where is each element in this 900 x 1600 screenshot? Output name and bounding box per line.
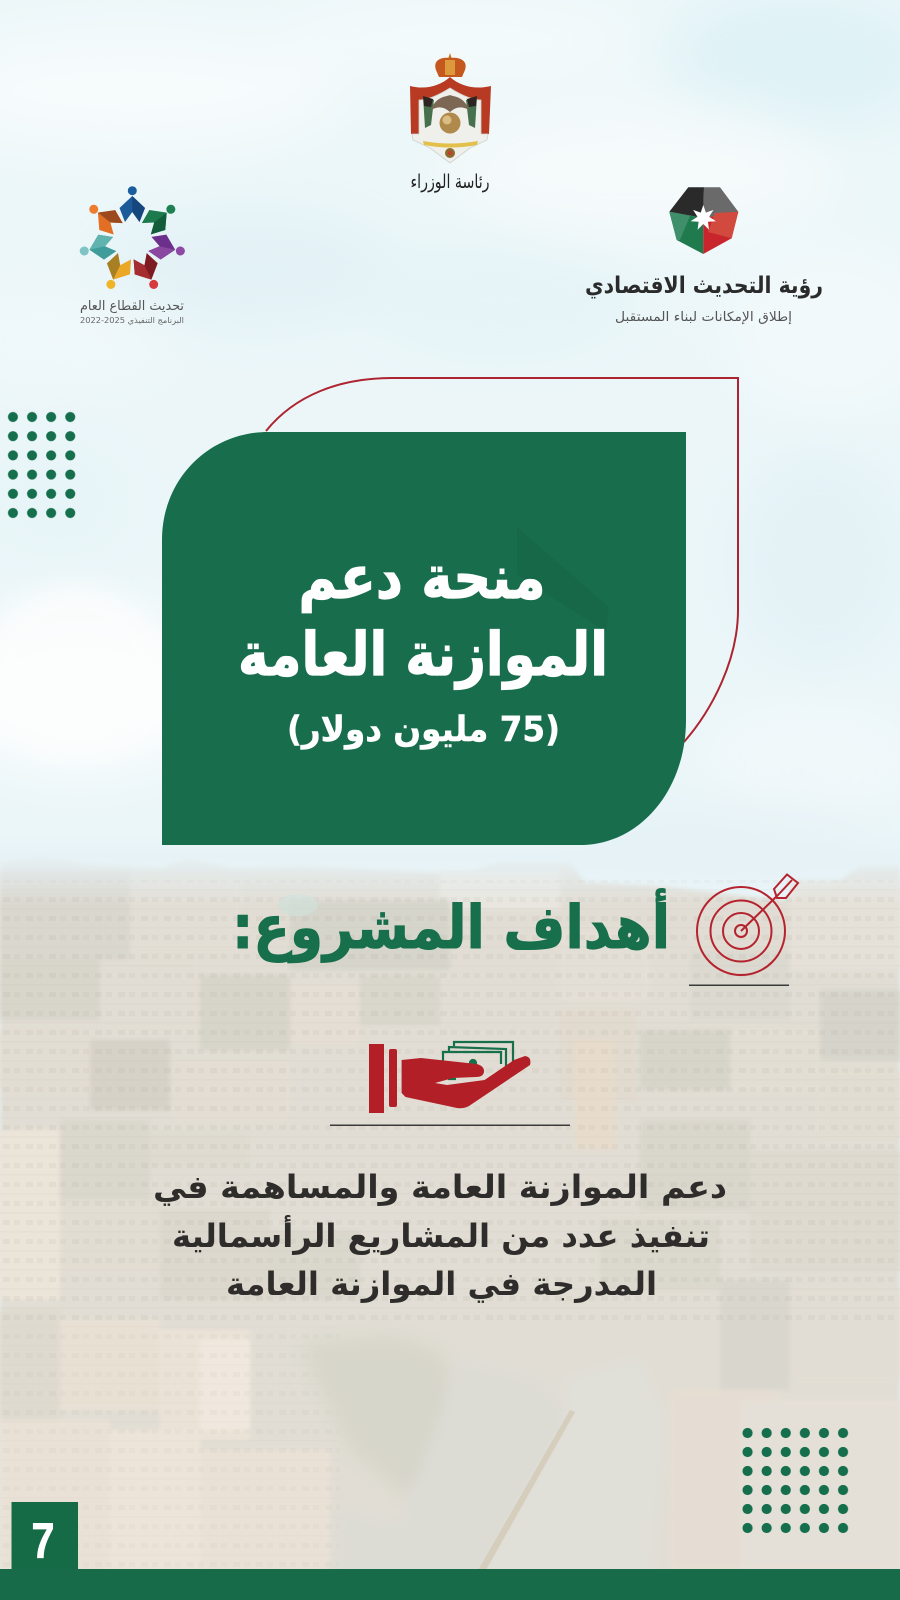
outline: red frame behind panel [266, 378, 738, 742]
title [238, 543, 608, 750]
page number badge: 7 [32, 1513, 54, 1569]
icon: hand holding money [369, 1042, 530, 1113]
logo: economic modernisation vision [669, 187, 738, 254]
text: economic modernisation vision [585, 273, 823, 325]
decorative dot grid: bottom right [738, 1424, 853, 1538]
divider under hand [330, 1124, 570, 1126]
cuff [369, 1044, 397, 1113]
text: public sector modernisation caption [80, 299, 184, 325]
panel: title card [162, 432, 686, 845]
flag watermark [517, 527, 609, 632]
text block: project goal description: دعم الموازنة العامة والمساهمة في [153, 1168, 727, 1206]
red person [129, 251, 167, 294]
decorative dot grid: top left [3, 407, 80, 523]
text: public sector modernisation caption: تحديث القطاع العام [80, 299, 184, 314]
text: economic modernisation vision: رؤية التحديث الاقتصادي [585, 273, 823, 299]
crown [435, 53, 466, 77]
purple person [147, 232, 188, 264]
divider under target [689, 984, 789, 986]
green person [138, 196, 182, 239]
banknotes [443, 1042, 513, 1079]
text block: project goal description: تنفيذ عدد من المشاريع الرأسمالية [172, 1215, 710, 1255]
hand [402, 1056, 530, 1108]
teal person [77, 232, 118, 264]
shield mantle [410, 77, 491, 134]
icon: target with arrow [697, 874, 798, 975]
gold person [98, 251, 136, 294]
text block: project goal description [153, 1168, 727, 1303]
title: (75 مليون دولار) [287, 710, 560, 750]
text: Prime Ministry calligraphy: رئاسة الوزراء [410, 171, 490, 193]
title: الموازنة العامة [238, 620, 608, 690]
logo: public sector modernisation [77, 186, 188, 294]
orange person [82, 197, 126, 239]
logo: Prime Ministry emblem [410, 53, 491, 163]
title: منحة دعم [298, 543, 546, 613]
text: economic modernisation vision: إطلاق الإمكانات لبناء المستقبل [615, 310, 792, 325]
text block: project goal description: المدرجة في الموازنة العامة [226, 1265, 657, 1303]
blue person [120, 186, 145, 222]
heading: project goals: أهداف المشروع: [232, 888, 670, 963]
page number badge [12, 1502, 78, 1569]
footer bar [0, 1569, 900, 1600]
text: public sector modernisation caption: البرنامج التنفيذي 2025-2022 [80, 316, 184, 325]
